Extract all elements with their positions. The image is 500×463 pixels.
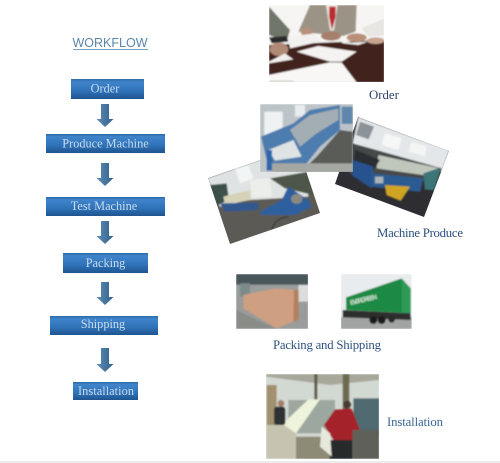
photo: container truck: EVERGREEN — [350, 294, 378, 307]
step: Produce Machine — [46, 134, 165, 153]
step: Test Machine: Test Machine — [71, 199, 138, 213]
step: Packing — [63, 253, 148, 273]
photo: order meeting — [269, 5, 384, 82]
arrow: test to packing — [96, 221, 114, 244]
step: Packing: Packing — [86, 256, 125, 270]
arrow: shipping to installation — [96, 348, 114, 372]
step: Test Machine — [46, 197, 165, 216]
photo: machine left — [208, 160, 320, 244]
photo: machine center — [260, 104, 353, 172]
arrow: produce to test — [96, 163, 114, 186]
label: Machine Produce: Machine Produce — [377, 226, 463, 240]
title: WORKFLOW — [72, 36, 148, 50]
photo: machine right — [335, 117, 449, 217]
label: Installation: Installation — [387, 415, 444, 429]
arrow: packing to shipping — [96, 282, 114, 305]
step: Installation: Installation — [78, 384, 134, 398]
flowchart — [46, 79, 165, 400]
step: Shipping: Shipping — [81, 317, 125, 331]
step: Shipping — [50, 316, 158, 335]
photo: packing crate — [236, 274, 308, 329]
arrow: order to produce — [96, 104, 114, 127]
step: Installation — [73, 382, 138, 400]
step: Order — [71, 79, 144, 99]
step: Order: Order — [91, 82, 119, 96]
photo: installation — [266, 374, 379, 459]
photo: container truck — [341, 274, 412, 329]
step: Produce Machine: Produce Machine — [62, 136, 149, 150]
label: Order: Order — [369, 88, 400, 102]
label: Packing and Shipping: Packing and Shipping — [273, 338, 382, 352]
